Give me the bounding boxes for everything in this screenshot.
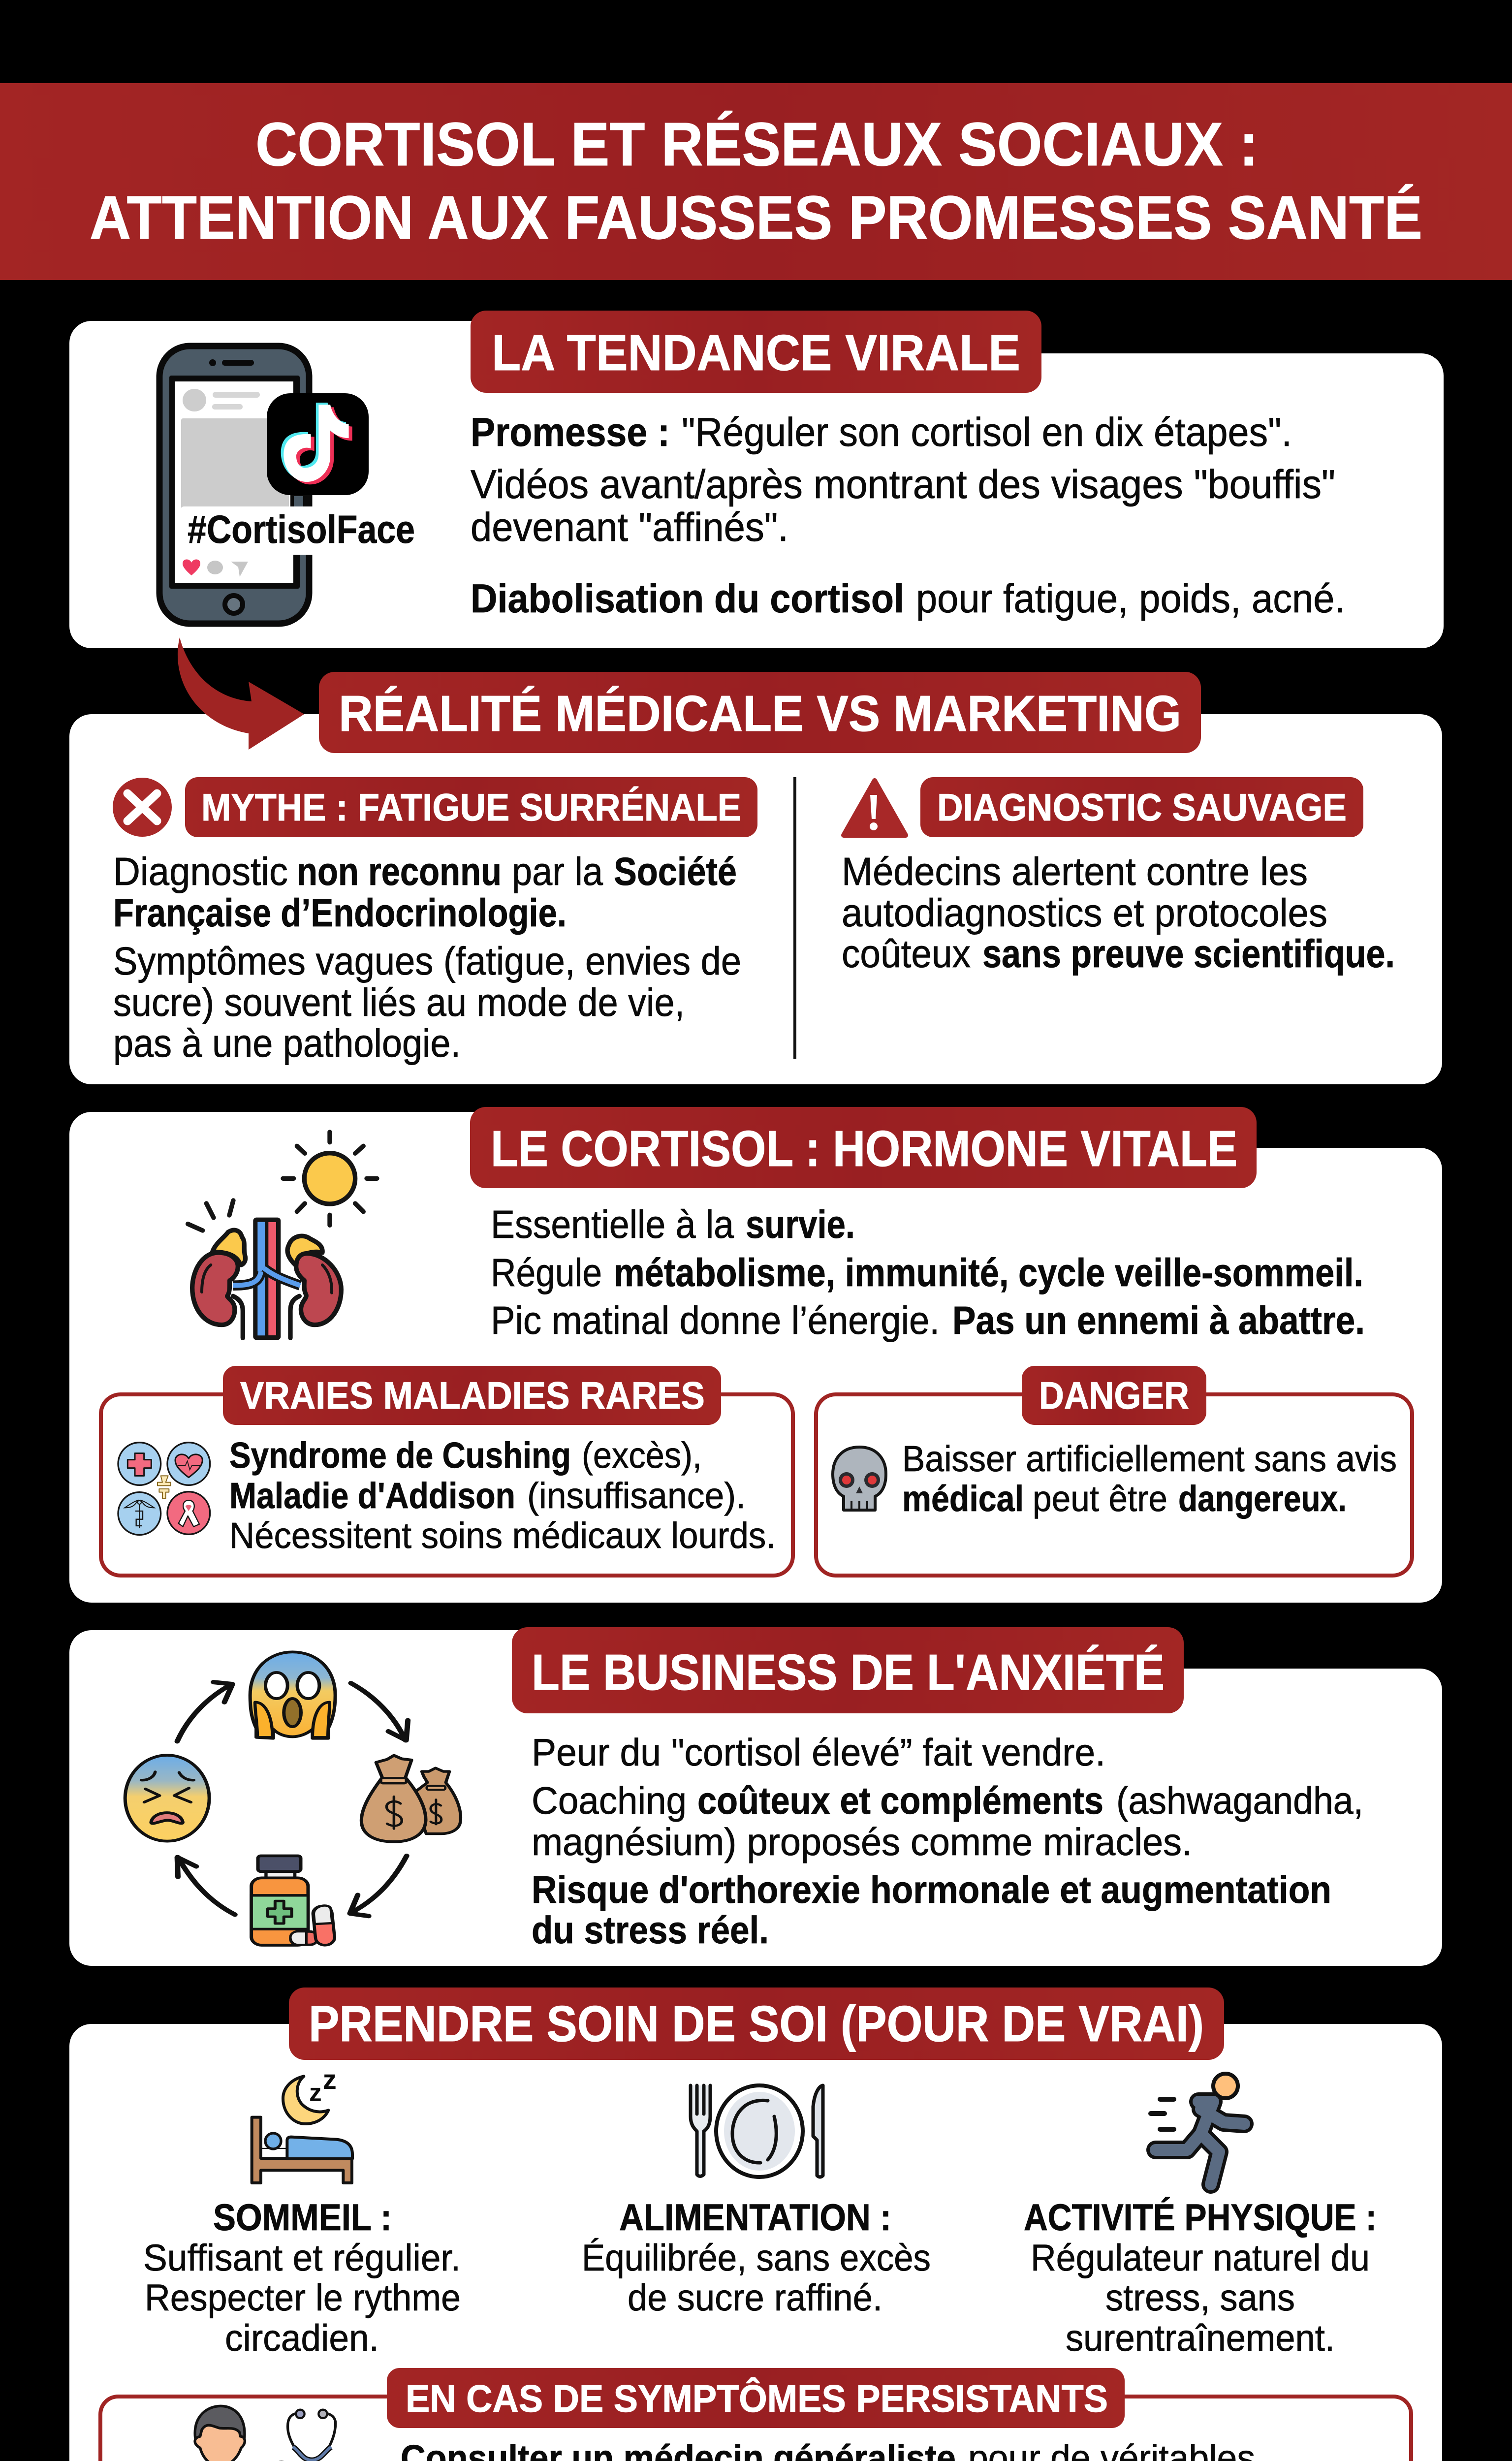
text: business: (ashwagandha, <box>1116 1779 1363 1822</box>
icon: money bags <box>361 1755 461 1842</box>
text: vraies maladies: (insuffisance). <box>527 1475 746 1516</box>
text: business: Risque d'orthorexie hormonale et augmentation <box>532 1868 1331 1911</box>
text: mythe: Française d’Endocrinologie. <box>113 891 567 935</box>
badge: hormone vitale: LE CORTISOL : HORMONE VITALE <box>491 1120 1237 1177</box>
panel: le cortisol hormone vitale <box>69 1107 1442 1603</box>
box: danger <box>816 1366 1412 1576</box>
icon: tired face <box>125 1755 209 1841</box>
text: mythe: Diagnostic <box>113 850 288 893</box>
text: mythe: sucre) souvent liés au mode de vie, <box>113 980 685 1024</box>
text: mythe: non reconnu <box>297 850 502 893</box>
text: business: Coaching <box>532 1779 687 1822</box>
text: business: du stress réel. <box>532 1908 769 1952</box>
hashtag: #CortisolFace <box>188 507 415 551</box>
badge: mythe: MYTHE : FATIGUE SURRÉNALE <box>201 786 741 829</box>
callout: en cas de symptômes persistants <box>100 2368 1411 2461</box>
text: sommeil: Respecter le rythme <box>145 2277 461 2319</box>
text: promesse: "Réguler son cortisol en dix étapes". <box>682 410 1292 455</box>
icon: runner <box>1151 2074 1244 2184</box>
text: danger: dangereux. <box>1178 1478 1347 1519</box>
badge: business <box>512 1627 1184 1713</box>
badge: diagnostic sauvage: DIAGNOSTIC SAUVAGE <box>937 786 1347 829</box>
text: business: coûteux et compléments <box>697 1779 1103 1822</box>
icon: cross in circle <box>113 778 172 837</box>
text: diagnostic sauvage: autodiagnostics et protocoles <box>842 891 1327 935</box>
text: promesse <box>471 410 1345 621</box>
column: activité physique <box>1024 2074 1377 2359</box>
text: vraies maladies: Maladie d'Addison <box>229 1475 515 1516</box>
text: mythe: pas à une pathologie. <box>113 1021 461 1065</box>
text: diagnostic sauvage: coûteux <box>842 932 971 976</box>
icon: screaming face <box>250 1652 335 1738</box>
text: promesse: Promesse : <box>471 410 670 455</box>
badge: diagnostic sauvage <box>920 777 1363 837</box>
icon: bed and moon <box>252 2064 352 2183</box>
icon: skull <box>833 1447 886 1510</box>
text: danger <box>902 1438 1397 1519</box>
icon: medical badges <box>118 1443 210 1535</box>
badge: prendre soin: PRENDRE SOIN DE SOI (POUR DE VRAI) <box>309 1995 1204 2052</box>
text: diagnostic sauvage <box>842 850 1395 976</box>
panel: réalité médicale vs marketing <box>69 672 1442 1084</box>
icon: phone with TikTok logo and hashtag <box>159 346 418 624</box>
badge: hormone vitale <box>470 1107 1257 1188</box>
text: sommeil: circadien. <box>225 2317 379 2359</box>
badge: réalité médicale: RÉALITÉ MÉDICALE VS MARKETING <box>339 685 1181 742</box>
panel: la tendance virale <box>69 311 1444 648</box>
badge: vraies maladies rares <box>223 1366 721 1425</box>
badge: symptômes persistants: EN CAS DE SYMPTÔMES PERSISTANTS <box>406 2377 1108 2420</box>
text: sommeil: Suffisant et régulier. <box>143 2237 461 2279</box>
text: mythe: Société <box>614 850 737 893</box>
column: mythe fatigue surrénale <box>113 777 757 1065</box>
text: hormone vitale: Essentielle à la <box>491 1202 734 1246</box>
badge: vraies maladies rares: VRAIES MALADIES RARES <box>240 1374 705 1417</box>
arrow: from phone to médical panel <box>178 637 304 750</box>
text: symptômes <box>401 2437 1255 2461</box>
badge: mythe <box>185 777 757 837</box>
text: hormone vitale: survie. <box>746 1202 855 1246</box>
text: sommeil: SOMMEIL : <box>213 2197 392 2239</box>
text: diagnostic sauvage: sans preuve scientifique. <box>982 932 1395 976</box>
text: activité physique: surentraînement. <box>1066 2317 1335 2359</box>
badge: danger: DANGER <box>1039 1374 1189 1417</box>
text: vraies maladies <box>229 1435 776 1556</box>
icon: bed and moon: z <box>323 2064 336 2095</box>
text: danger: médical <box>902 1478 1024 1519</box>
icon: anxiety cycle <box>125 1652 461 1946</box>
text: mythe <box>113 850 741 1065</box>
text: vraies maladies: (excès), <box>582 1435 702 1476</box>
icon: tiktok <box>267 393 369 495</box>
text: mythe: par la <box>512 850 603 893</box>
icon: social reactions <box>183 559 248 577</box>
text: hormone vitale: métabolisme, immunité, cycle veille-sommeil. <box>614 1251 1363 1294</box>
header banner <box>0 83 1512 280</box>
icon: plate and cutlery <box>691 2085 823 2177</box>
icon: warning triangle <box>844 781 906 835</box>
text: mythe: Symptômes vagues (fatigue, envies de <box>113 939 741 983</box>
text: alimentation: ALIMENTATION : <box>619 2197 891 2239</box>
badge: la tendance virale: LA TENDANCE VIRALE <box>492 324 1020 381</box>
badge: business: LE BUSINESS DE L'ANXIÉTÉ <box>532 1644 1165 1701</box>
text: alimentation: de sucre raffiné. <box>628 2277 882 2319</box>
icon: bed and moon: z <box>309 2079 321 2106</box>
text: business: magnésium) proposés comme miracles. <box>532 1820 1192 1863</box>
box: vraies maladies rares <box>101 1366 793 1576</box>
text: promesse: Diabolisation du cortisol <box>471 576 904 621</box>
text: sommeil <box>143 2197 461 2359</box>
text: promesse: Vidéos avant/après montrant des visages "bouffis" <box>471 462 1335 507</box>
text: hormone vitale <box>491 1202 1365 1342</box>
text: business: Peur du "cortisol élevé” fait vendre. <box>532 1731 1105 1774</box>
title: ATTENTION AUX FAUSSES PROMESSES SANTÉ <box>90 184 1422 252</box>
column: diagnostic sauvage <box>842 777 1395 976</box>
icon: doctor with stethoscope <box>168 2406 336 2461</box>
text: diagnostic sauvage: Médecins alertent contre les <box>842 850 1308 893</box>
text: hormone vitale: Pas un ennemi à abattre. <box>952 1298 1365 1342</box>
badge: réalité médicale <box>319 672 1201 753</box>
column: alimentation <box>582 2085 931 2319</box>
badge: danger <box>1022 1366 1206 1425</box>
text: alimentation: Équilibrée, sans excès <box>582 2237 931 2279</box>
text: activité physique: ACTIVITÉ PHYSIQUE : <box>1024 2197 1377 2239</box>
panel: prendre soin de soi <box>69 1988 1442 2461</box>
title <box>90 110 1422 252</box>
text: vraies maladies: Syndrome de Cushing <box>229 1435 571 1476</box>
badge: la tendance virale <box>471 311 1041 393</box>
text: danger: Baisser artificiellement sans avis <box>902 1438 1397 1479</box>
text: danger: peut être <box>1033 1478 1167 1519</box>
icon: supplements bottle <box>252 1856 335 1946</box>
badge: symptômes persistants <box>387 2368 1125 2428</box>
text: hormone vitale: Pic matinal donne l’énergie. <box>491 1298 940 1342</box>
text: activité physique <box>1024 2197 1377 2359</box>
icon: sun and kidneys <box>188 1132 377 1338</box>
panel: le business de l'anxiété <box>69 1627 1442 1966</box>
icon: arrows <box>177 1682 408 1916</box>
text: hormone vitale: Régule <box>491 1251 602 1294</box>
title: CORTISOL ET RÉSEAUX SOCIAUX : <box>255 110 1259 179</box>
text: alimentation <box>582 2197 931 2319</box>
text: activité physique: stress, sans <box>1105 2277 1295 2319</box>
text: activité physique: Régulateur naturel du <box>1031 2237 1370 2279</box>
text: vraies maladies: Nécessitent soins médicaux lourds. <box>229 1515 776 1556</box>
text: business <box>532 1731 1363 1952</box>
text: promesse: devenant "affinés". <box>471 505 788 550</box>
text: promesse: pour fatigue, poids, acné. <box>916 576 1345 621</box>
column: sommeil <box>143 2064 461 2359</box>
